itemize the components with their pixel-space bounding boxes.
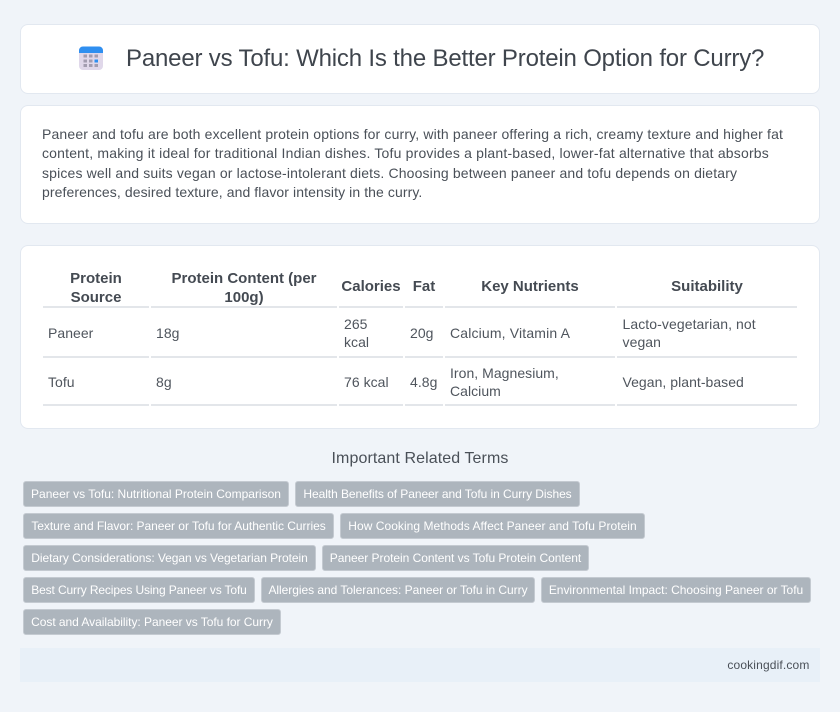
comparison table: [43, 270, 797, 406]
footer: [20, 648, 820, 682]
tag: Paneer Protein Content vs Tofu Protein Content: [330, 551, 581, 565]
text block: introduction: content, making it ideal for traditional Indian dishes. Tofu provides a plant-based, lower-fat alternative that absorbs: [42, 145, 769, 161]
tag: Dietary Considerations: Vegan vs Vegetarian Protein: [31, 551, 308, 565]
panel: introduction: [20, 105, 820, 224]
row: paneer: 265: [344, 316, 367, 332]
tag: [23, 481, 289, 507]
row: paneer: 18g: [156, 325, 179, 341]
header: protein content: 100g): [224, 289, 264, 306]
text block: introduction: [42, 126, 783, 200]
text block: introduction: spices well and suits vegan or lactose-intolerant diets. Choosing between paneer and tofu depends on dietary: [42, 165, 737, 181]
tag: [23, 609, 281, 635]
row: tofu: Calcium: [450, 383, 501, 399]
tag: [261, 577, 535, 603]
tag: Texture and Flavor: Paneer or Tofu for Authentic Curries: [31, 519, 326, 533]
row: tofu: Vegan, plant-based: [622, 374, 744, 390]
text block: introduction: Paneer and tofu are both excellent protein options for curry, with paneer offering a rich, creamy texture and higher fat: [42, 126, 783, 142]
tag: Health Benefits of Paneer and Tofu in Curry Dishes: [303, 487, 572, 501]
tag: Allergies and Tolerances: Paneer or Tofu in Curry: [268, 583, 528, 597]
row: paneer: Paneer: [48, 325, 93, 341]
row: tofu: Tofu: [48, 374, 75, 390]
tag: Cost and Availability: Paneer vs Tofu for Curry: [31, 615, 273, 629]
row: paneer: kcal: [344, 334, 369, 350]
row: tofu: 76 kcal: [344, 374, 389, 390]
header: calories: Calories: [341, 278, 401, 295]
tags: related terms: [23, 481, 811, 635]
header: fat: Fat: [413, 278, 435, 295]
row: tofu: 8g: [156, 374, 172, 390]
header: protein source: Protein: [70, 270, 122, 287]
header: protein content: [172, 270, 316, 306]
text block: introduction: preferences, desired texture, and flavor intensity in the curry.: [42, 184, 422, 200]
header: protein source: Source: [71, 289, 121, 306]
tag: [295, 481, 580, 507]
header: key nutrients: Key Nutrients: [481, 278, 579, 295]
tag: [23, 545, 316, 571]
footer: source: cookingdif.com: [727, 658, 810, 672]
row: paneer: vegan: [622, 334, 661, 350]
title: Paneer vs Tofu: Which Is the Better Protein Option for Curry?: [126, 45, 764, 72]
tag: [322, 545, 589, 571]
panel: header: [20, 24, 820, 94]
heading: related terms: Important Related Terms: [332, 450, 508, 467]
tag: Paneer vs Tofu: Nutritional Protein Comparison: [31, 487, 281, 501]
row: tofu: [48, 365, 744, 399]
row: tofu: 4.8g: [410, 374, 437, 390]
row: paneer: 20g: [410, 325, 433, 341]
row: paneer: [48, 316, 756, 350]
tag: How Cooking Methods Affect Paneer and Tofu Protein: [348, 519, 637, 533]
header: suitability: Suitability: [671, 278, 743, 295]
icon: calendar: [79, 46, 103, 70]
tag: [23, 577, 255, 603]
panel: comparison table: [20, 245, 820, 429]
row: tofu: Iron, Magnesium,: [450, 365, 559, 381]
tag: [541, 577, 811, 603]
tag: [23, 513, 334, 539]
tag: Best Curry Recipes Using Paneer vs Tofu: [31, 583, 247, 597]
row: paneer: Lacto-vegetarian, not: [622, 316, 756, 332]
header: protein content: Protein Content (per: [172, 270, 316, 287]
tag: Environmental Impact: Choosing Paneer or Tofu: [549, 583, 803, 597]
header: protein source: [70, 270, 122, 306]
tag: [340, 513, 645, 539]
row: paneer: Calcium, Vitamin A: [450, 325, 570, 341]
